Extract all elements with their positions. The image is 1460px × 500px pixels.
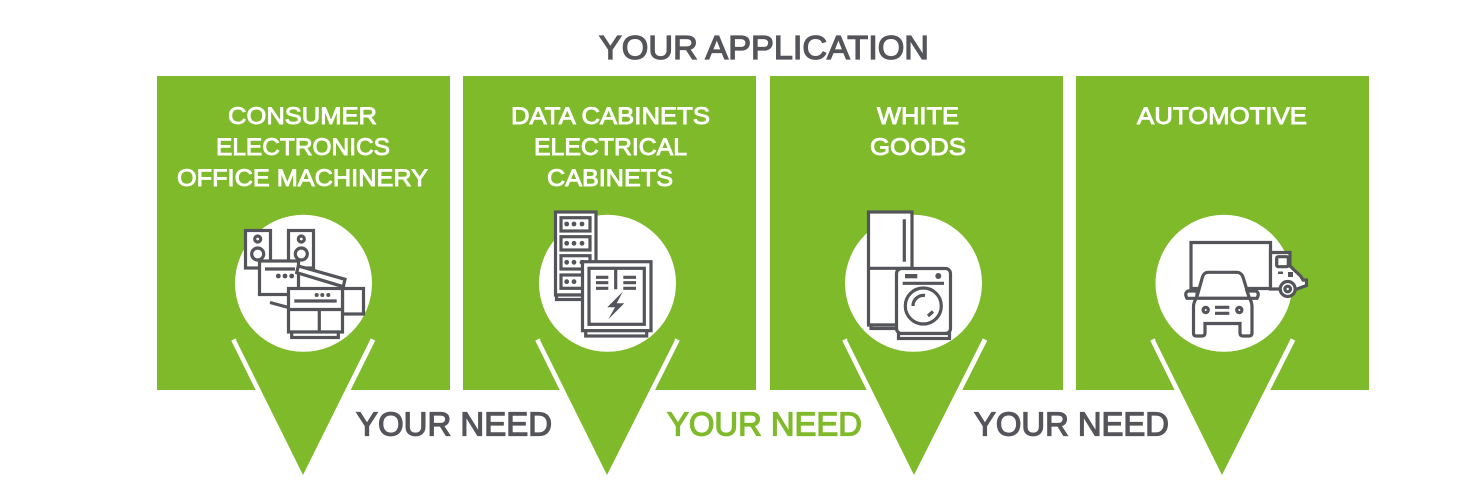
title: YOUR APPLICATION [599,30,929,67]
label: your need 2: YOUR NEED [667,406,862,444]
heading: consumer electronics: OFFICE MACHINERY [177,165,428,192]
icon: server rack and electrical cabinet [556,212,651,336]
heading: data cabinets: CABINETS [547,165,673,192]
label: your need 3: YOUR NEED [974,406,1169,444]
heading: data cabinets [511,103,710,192]
heading: automotive: AUTOMOTIVE [1137,103,1307,130]
label: your need 1: YOUR NEED [356,406,552,444]
heading: consumer electronics [177,103,428,192]
heading: white goods [870,103,966,161]
heading: consumer electronics: ELECTRONICS [216,134,390,161]
icon: truck and car [1186,242,1306,336]
pin marker [844,215,985,475]
heading: consumer electronics: CONSUMER [228,103,377,130]
heading: white goods: GOODS [870,134,966,161]
panel: automotive [1076,76,1369,475]
panel: data and electrical cabinets [463,76,756,475]
panel: white goods [770,76,1063,475]
icon: speakers, printer and copier [246,230,364,338]
icon: fridge and washing machine [868,212,950,338]
pin marker [234,215,373,475]
pin marker [538,215,678,475]
heading: data cabinets: ELECTRICAL [534,134,687,161]
heading: white goods: WHITE [877,103,959,130]
heading: data cabinets: DATA CABINETS [511,103,710,130]
pin marker [1152,215,1293,475]
panel: consumer electronics [157,76,450,475]
